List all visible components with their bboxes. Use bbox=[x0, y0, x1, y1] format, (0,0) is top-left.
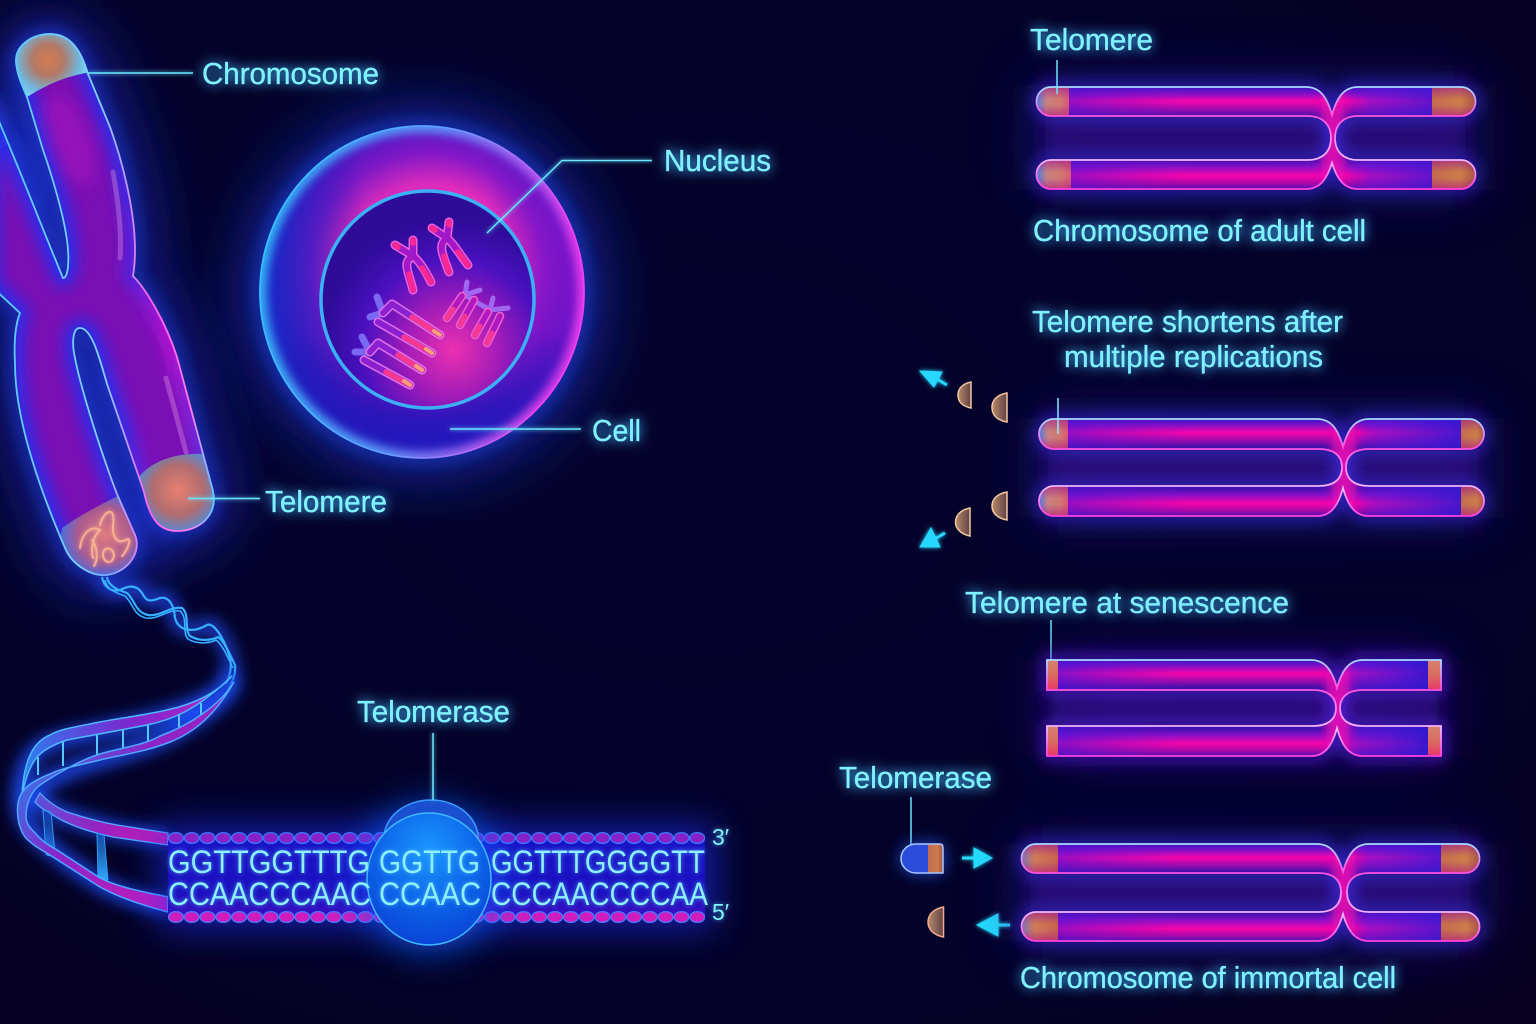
thick rungs bbox=[43, 810, 108, 883]
enzyme body bbox=[367, 813, 491, 945]
leader: shortened telomere bbox=[1057, 398, 1059, 434]
label: telomere shortens: multiple replications bbox=[1064, 339, 1323, 374]
cytoplasm bbox=[260, 126, 584, 458]
lower strand bbox=[17, 682, 234, 912]
label: nucleus: Nucleus bbox=[664, 143, 771, 178]
removed telomere fragments bbox=[956, 382, 1007, 536]
DNA sequence letters bbox=[168, 844, 708, 912]
upper strand bbox=[22, 676, 232, 795]
ribbon glow bbox=[20, 673, 234, 907]
strand end labels: 5′ bbox=[712, 899, 729, 925]
DNA ribbon bbox=[17, 673, 234, 912]
telomere DNA squiggle bbox=[80, 512, 129, 566]
DNA helix thin strand bbox=[102, 577, 235, 690]
leader: telomerase right bbox=[910, 797, 912, 846]
strand end labels: 3′ bbox=[712, 824, 729, 850]
telomere caps bbox=[1037, 87, 1476, 190]
leader: cell bbox=[450, 428, 581, 430]
leader: telomerase bbox=[432, 733, 434, 800]
chromosome shortened telomere bbox=[1038, 405, 1485, 529]
label: telomere shortens: Telomere shortens after bbox=[1032, 304, 1343, 339]
arrow: up-left bbox=[920, 371, 947, 387]
label: chromosome: Chromosome bbox=[202, 56, 379, 91]
leader: telomere bbox=[188, 498, 260, 500]
telomere fragment bbox=[928, 907, 944, 937]
label: telomerase right: Telomerase bbox=[839, 760, 992, 795]
nucleus bbox=[321, 191, 534, 408]
chromosome of adult cell bbox=[1035, 76, 1476, 200]
chromosome at senescence bbox=[1047, 646, 1441, 770]
chromosome of immortal cell bbox=[1021, 830, 1480, 954]
telomerase piece bbox=[901, 844, 943, 873]
telomere caps bbox=[1022, 844, 1480, 942]
mini chromosome pair right bbox=[447, 282, 508, 343]
DNA sequence letters: CCAACCCAAC bbox=[168, 876, 371, 912]
highlight streaks bbox=[113, 172, 186, 452]
telomere cap: lower left bbox=[60, 496, 136, 574]
DNA sequence letters: GGTTTGGGGTT bbox=[491, 844, 705, 880]
DNA sequence letters: CCCAACCCCAA bbox=[491, 876, 708, 912]
mini chromosome pair top bbox=[395, 222, 468, 290]
leader: telomere top bbox=[1056, 60, 1058, 94]
leader: senescence bbox=[1050, 620, 1052, 664]
telomere cap: top bbox=[16, 34, 87, 96]
arrow: down-left bbox=[920, 528, 945, 547]
arrow: left bbox=[977, 914, 1010, 936]
enzyme dome bbox=[384, 800, 478, 876]
label: telomerase: Telomerase bbox=[357, 694, 510, 729]
DNA sequence letters: GGTTG bbox=[379, 844, 480, 880]
DNA sequence band bbox=[160, 825, 715, 929]
label: telomere top: Telomere bbox=[1030, 22, 1153, 57]
label: telomere shortens bbox=[1032, 304, 1343, 374]
label: cell: Cell bbox=[592, 413, 641, 448]
telomere caps bbox=[1039, 419, 1485, 517]
label: telomere: Telomere bbox=[265, 484, 387, 519]
DNA sequence letters: GGTTGGTTTG bbox=[168, 844, 370, 880]
cell bbox=[260, 126, 584, 458]
label: telomere at senescence: Telomere at senescence bbox=[965, 585, 1289, 620]
ribbon rungs bbox=[38, 703, 201, 775]
bead strands bbox=[168, 831, 705, 924]
telomere caps bbox=[1047, 660, 1441, 756]
mini chromosome pair left bbox=[355, 297, 440, 385]
leader: nucleus bbox=[487, 160, 652, 233]
leader: chromosome bbox=[88, 72, 193, 74]
telomere cap: lower right bbox=[140, 454, 213, 530]
strand end labels bbox=[712, 824, 729, 925]
arrow: right bbox=[962, 848, 992, 868]
hairpin strand bbox=[35, 793, 168, 845]
telomerase enzyme bbox=[360, 800, 500, 952]
label: chromosome of adult cell: Chromosome of adult cell bbox=[1033, 213, 1366, 248]
label: chromosome of immortal cell: Chromosome of immortal cell bbox=[1020, 960, 1396, 995]
chromosome large bbox=[0, 20, 240, 600]
DNA sequence letters: CCAAC bbox=[379, 876, 481, 912]
